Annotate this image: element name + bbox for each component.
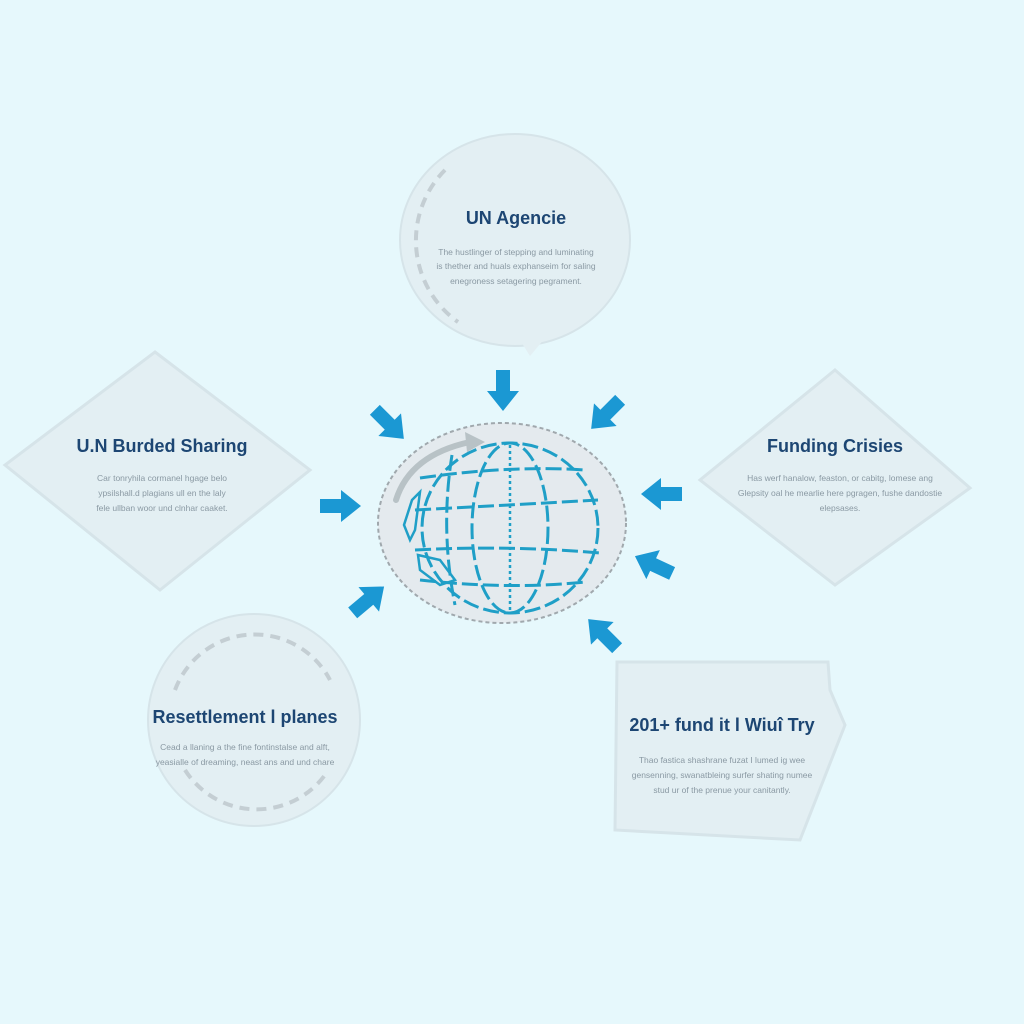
arrows [320, 370, 682, 659]
panel: U.N Burded Sharing [5, 352, 310, 590]
panel: UN Agencie [400, 134, 630, 356]
text block [156, 742, 335, 767]
panel: 201+ fund it [615, 662, 845, 840]
text block: Glepsity oal he mearlie here pgragen, fushe dandostie [738, 488, 942, 498]
text block: ypsilshall.d plagians ull en the laly [98, 488, 227, 498]
heading: Resettlement l planes [152, 707, 338, 727]
text block: gensenning, swanatbleing surfer shating numee [632, 770, 813, 780]
text block: stud ur of the prenue your canitantly. [653, 785, 791, 795]
heading: Funding Crisies [767, 436, 903, 456]
globe [378, 423, 626, 623]
text block [436, 247, 596, 286]
panel: Funding Crisies [700, 370, 970, 585]
text block: Thao fastica shashrane fuzat I lumed ig wee [639, 755, 805, 765]
text block [96, 473, 228, 513]
text block: Car tonryhila cormanel hgage belo [97, 473, 227, 483]
text block: is thether and huals exphanseim for saling [436, 261, 596, 271]
heading: U.N Burded Sharing [76, 436, 248, 456]
heading: 201+ fund it l Wiuî Try [629, 715, 815, 735]
text block: fele ullban woor und clnhar caaket. [96, 503, 228, 513]
text block: elepsases. [820, 503, 860, 513]
text block: Cead a llaning a the fine fontinstalse and alft, [160, 742, 330, 752]
text block: The hustlinger of stepping and luminating [438, 247, 594, 257]
text block [738, 473, 942, 513]
text block: yeasialle of dreaming, neast ans and und chare [156, 757, 335, 767]
text block: enegroness setagering pegrament. [450, 276, 582, 286]
text block [632, 755, 813, 795]
heading: UN Agencie: UN Agencie [466, 208, 566, 228]
panel: Resettlement planes [148, 614, 360, 826]
text block: Has werf hanalow, feaston, or cabitg, lomese ang [747, 473, 933, 483]
